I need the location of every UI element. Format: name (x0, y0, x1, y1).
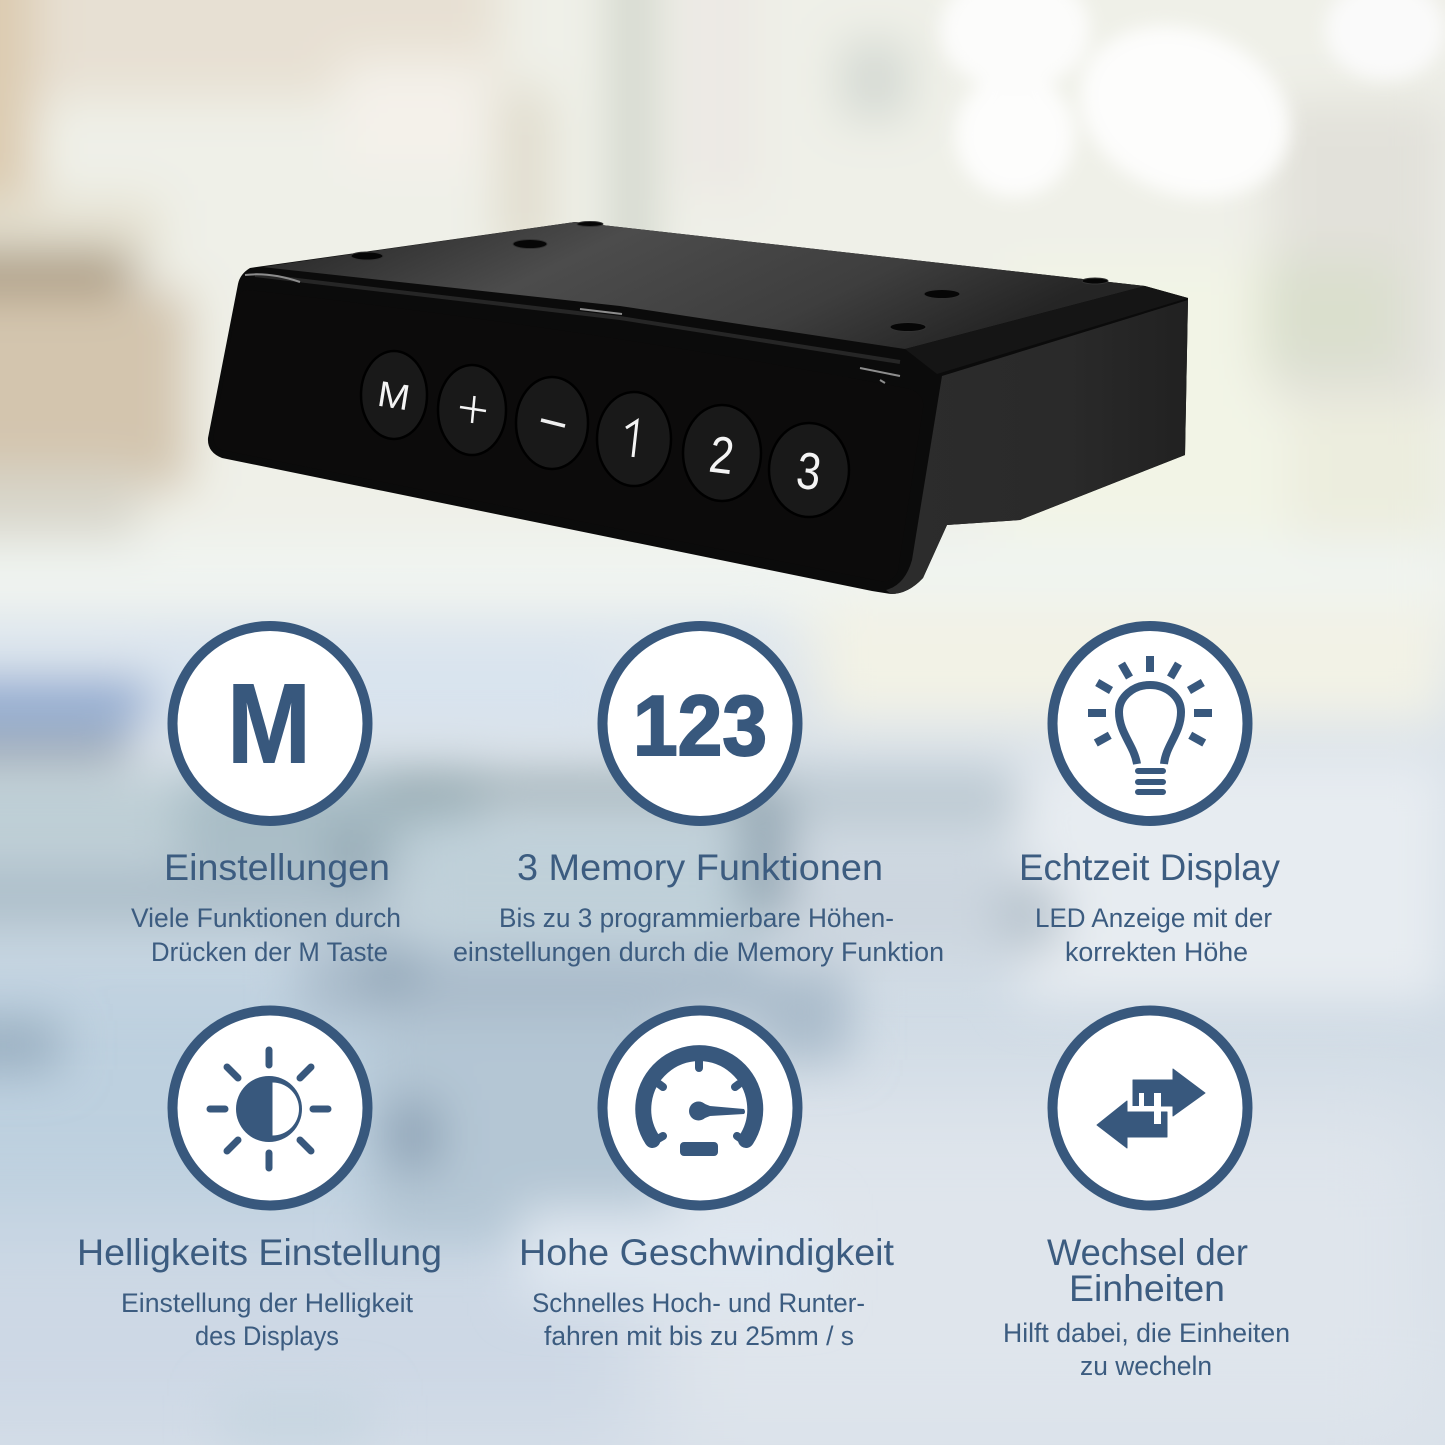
heading and text: Hohe Geschwindigkeit: Schnelles Hoch- und Runter- (532, 1288, 865, 1318)
icon: 123 memory (602, 626, 798, 821)
glossy lip (255, 275, 900, 362)
heading and text: Wechsel der Einheiten: Wechsel der (1047, 1232, 1248, 1273)
button 3: 3 (793, 442, 824, 502)
heading and text: Wechsel der Einheiten: Einheiten (1069, 1268, 1225, 1309)
mounting holes (351, 222, 1108, 332)
button minus (516, 377, 588, 469)
heading and text: Echtzeit Display (1019, 847, 1280, 967)
icon: light bulb display (1052, 626, 1248, 821)
heading and text: 3 Memory Funktionen: Bis zu 3 programmierbare Höhen- (499, 903, 894, 933)
device silhouette (208, 222, 1188, 594)
device side face (886, 300, 1188, 594)
button 1 (597, 392, 671, 486)
icon: switching arrows (1052, 1010, 1248, 1206)
heading and text: Wechsel der Einheiten: zu wecheln (1080, 1351, 1212, 1381)
heading and text: Hohe Geschwindigkeit (519, 1232, 895, 1351)
heading and text: 3 Memory Funktionen: 3 Memory Funktionen (517, 847, 883, 888)
heading and text: Echtzeit Display: korrekten Höhe (1065, 937, 1248, 967)
button M (361, 351, 427, 439)
heading and text: 3 Memory Funktionen: einstellungen durch die Memory Funktion (453, 937, 944, 967)
chamfer (905, 286, 1188, 374)
icon: M settings (172, 626, 368, 821)
heading and text: Helligkeits Einstellung (77, 1232, 442, 1351)
button 2: 2 (706, 426, 737, 486)
icon: brightness sun (172, 1010, 368, 1206)
glossy edge highlights (245, 274, 900, 383)
heading and text: Einstellungen (131, 847, 401, 967)
button 3 (769, 423, 849, 517)
button M: M (375, 373, 413, 418)
heading and text: Einstellungen: Viele Funktionen durch (131, 903, 401, 933)
heading and text: Hohe Geschwindigkeit: Hohe Geschwindigkeit (519, 1232, 895, 1273)
button 2 (683, 405, 761, 501)
icon: 123 memory: 123 (633, 679, 767, 774)
heading and text: Echtzeit Display: LED Anzeige mit der (1035, 903, 1272, 933)
icon: speedometer (602, 1010, 798, 1206)
heading and text: 3 Memory Funktionen (453, 847, 944, 967)
heading and text: Hohe Geschwindigkeit: fahren mit bis zu 25mm / s (544, 1321, 854, 1351)
heading and text: Wechsel der Einheiten: Hilft dabei, die Einheiten (1003, 1318, 1290, 1348)
heading and text: Helligkeits Einstellung: des Displays (195, 1321, 339, 1351)
heading and text: Helligkeits Einstellung: Helligkeits Einstellung (77, 1232, 442, 1273)
device top face (262, 222, 1145, 349)
device front panel (214, 290, 923, 581)
product: control panel with buttons (208, 222, 1188, 594)
heading and text: Wechsel der Einheiten (1003, 1232, 1290, 1381)
heading and text: Einstellungen: Drücken der M Taste (151, 937, 388, 967)
heading and text: Echtzeit Display: Echtzeit Display (1019, 847, 1280, 888)
button plus (438, 365, 506, 455)
icon: M settings: M (227, 660, 311, 786)
heading and text: Helligkeits Einstellung: Einstellung der Helligkeit (121, 1288, 413, 1318)
heading and text: Einstellungen: Einstellungen (164, 847, 390, 888)
